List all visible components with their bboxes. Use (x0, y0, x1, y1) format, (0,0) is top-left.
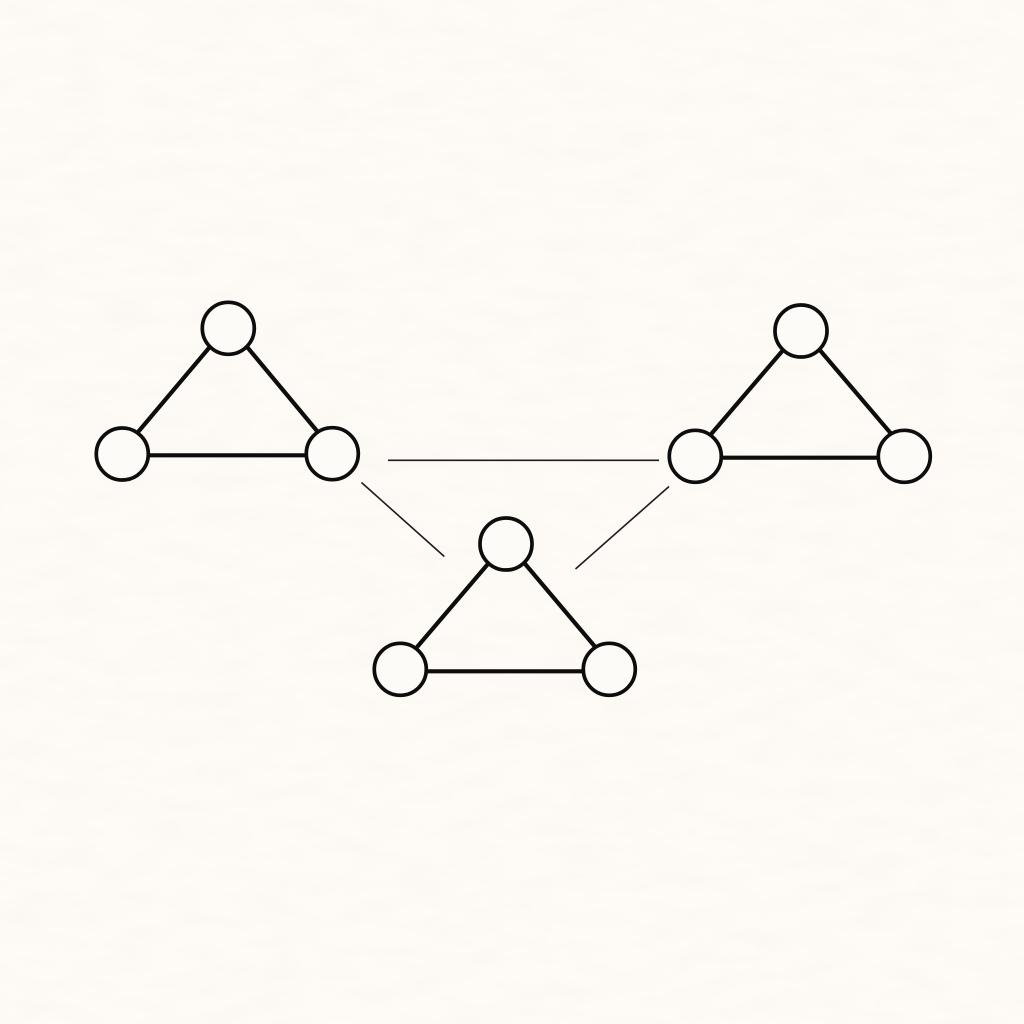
connector: left to bottom (362, 482, 444, 556)
connector: left to right (388, 459, 659, 461)
triangle cluster: right (669, 305, 930, 482)
triangle cluster: left (96, 302, 358, 480)
triangle cluster: bottom center (374, 518, 635, 695)
connector: right to bottom (576, 486, 669, 569)
